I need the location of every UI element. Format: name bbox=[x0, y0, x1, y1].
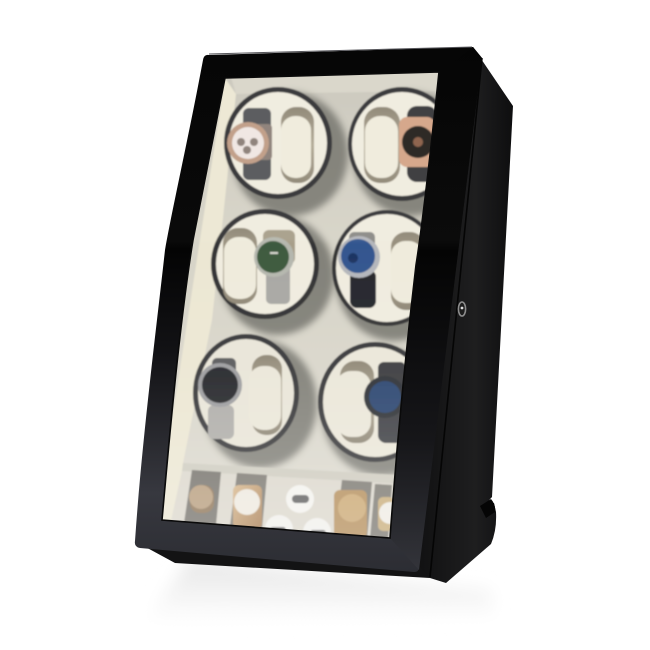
watch: rose-gold square bbox=[399, 106, 437, 182]
compartment 2 bbox=[230, 473, 267, 529]
winder 3 bbox=[211, 209, 334, 335]
watch: navy dial bbox=[364, 362, 408, 443]
compartment 3 bbox=[334, 480, 372, 540]
base lip of the cabinet bbox=[140, 544, 430, 578]
pillow bbox=[391, 241, 423, 303]
lock bbox=[458, 302, 466, 316]
pillow bbox=[365, 116, 398, 178]
cabinet side panel and foot bbox=[418, 47, 513, 583]
frame highlight top bbox=[209, 47, 472, 54]
pillow bbox=[224, 237, 256, 299]
pillow bbox=[249, 366, 281, 430]
watch: black diver bbox=[198, 358, 242, 439]
compartment 4 bbox=[370, 483, 392, 537]
pillow bbox=[336, 371, 371, 437]
storage compartment row bbox=[184, 470, 392, 537]
side seam bbox=[430, 58, 482, 577]
bottom shelf bbox=[182, 464, 394, 483]
glass window interior bbox=[162, 72, 438, 538]
front frame bbox=[135, 47, 482, 572]
winder 1 bbox=[224, 87, 348, 216]
back wall bbox=[170, 78, 436, 484]
winder 6 bbox=[317, 341, 406, 475]
watch: rose-gold chronograph bbox=[227, 108, 272, 180]
watch: green dial steel bbox=[254, 230, 295, 304]
glass reflection veil bbox=[163, 88, 435, 537]
winder 4 bbox=[331, 209, 422, 345]
pillow bbox=[281, 116, 311, 178]
winder 2 bbox=[347, 86, 436, 220]
left wall bbox=[163, 79, 236, 520]
window edge bbox=[162, 72, 439, 538]
top wall bbox=[232, 73, 438, 94]
compartment 1 bbox=[184, 470, 221, 525]
winder 5 bbox=[193, 334, 317, 468]
control dials bbox=[265, 484, 332, 532]
foot notch bbox=[480, 499, 495, 518]
watch: blue dial bbox=[338, 232, 380, 308]
product photo: watch winder cabinet bbox=[134, 46, 513, 602]
right frame section bbox=[390, 47, 482, 570]
floor reflection bbox=[145, 558, 495, 622]
